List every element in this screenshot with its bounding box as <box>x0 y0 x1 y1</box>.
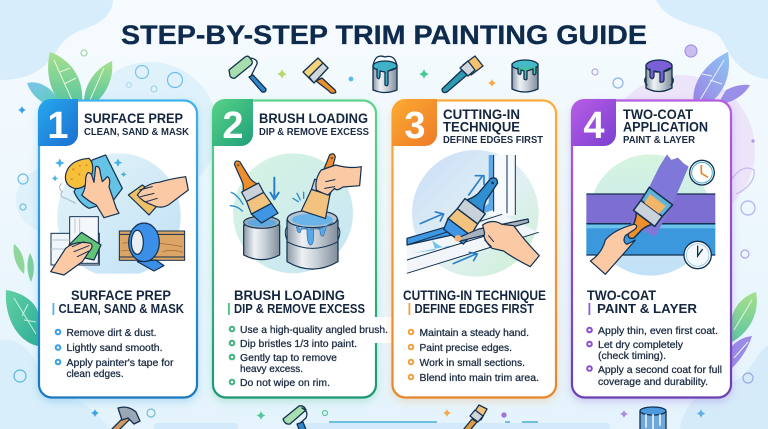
badge 2: 2 <box>222 105 244 147</box>
lower heading 1: SURFACE PREP <box>71 288 171 303</box>
heading 2 <box>259 111 369 138</box>
lower heading 4: PAINT & LAYER <box>597 302 697 316</box>
bullet list 2: Dip bristles 1/3 into paint. <box>240 338 357 350</box>
lower heading 2: DIP & REMOVE EXCESS <box>234 302 365 316</box>
icon: green-drip can, top <box>512 60 538 92</box>
leaves: right side <box>732 292 757 368</box>
bullet list 3: Paint precise edges. <box>420 342 512 354</box>
icon: roller, bottom <box>283 406 307 429</box>
bullet list 2: Gently tap to remove <box>240 352 337 364</box>
heading 1: SURFACE PREP <box>84 111 183 126</box>
card 2 frame <box>213 100 376 398</box>
bullet list 3 <box>409 327 539 384</box>
badge 3 <box>392 99 437 147</box>
icon: paint roller, top <box>229 56 266 92</box>
leaves: top left <box>27 52 112 102</box>
heading 3: DEFINE EDGES FIRST <box>443 134 544 146</box>
panel: step 3 cutting-in technique <box>392 99 556 398</box>
illustration: two coats on trim with clocks <box>586 154 715 276</box>
lower heading 3: DEFINE EDGES FIRST <box>414 302 534 316</box>
bullet list 3: Maintain a steady hand. <box>420 327 529 339</box>
badge 1 <box>38 99 78 147</box>
lower heading 1 <box>52 288 184 316</box>
bullet list 4: Apply a second coat for full <box>598 364 722 376</box>
bullet list 1: Apply painter's tape for <box>66 357 174 369</box>
card 3 frame <box>392 100 556 398</box>
bullet list 4: coverage and durability. <box>598 376 708 388</box>
white label overlapping card edge <box>370 317 392 343</box>
title: STEP-BY-STEP TRIM PAINTING GUIDE <box>121 20 647 50</box>
heading 4 <box>623 107 708 146</box>
icon: hammer, bottom <box>112 407 140 429</box>
bullet list 4: (check timing). <box>598 350 666 362</box>
panel: step 1 surface prep <box>38 99 197 398</box>
bullet list 4: Apply thin, even first coat. <box>598 325 718 337</box>
bullet list 2: heavy excess. <box>240 363 303 375</box>
heading 2: DIP & REMOVE EXCESS <box>259 126 369 138</box>
icon: blue paint can, bottom <box>640 407 666 429</box>
heading 3: CUTTING-IN <box>443 107 520 122</box>
bullet list 2: Use a high-quality angled brush. <box>240 324 388 336</box>
leaves: top right <box>693 52 754 194</box>
bullet list 2: Do not wipe on rim. <box>240 377 330 389</box>
lower heading 2: BRUSH LOADING <box>234 288 345 303</box>
badge 4: 4 <box>583 105 605 147</box>
lower heading 1: CLEAN, SAND & MASK <box>58 302 184 316</box>
panel: step 4 two-coat application <box>571 99 731 398</box>
badge 2 <box>212 99 253 147</box>
icon: brush, bottom <box>459 405 487 429</box>
bullet list 1: clean edges. <box>66 368 124 380</box>
heading 1: CLEAN, SAND & MASK <box>84 126 189 138</box>
icon: purple can, top <box>645 60 673 92</box>
heading 4: PAINT & LAYER <box>623 134 695 146</box>
illustration: cleaning, sanding and masking <box>51 153 188 275</box>
lower heading 4: TWO-COAT <box>587 288 657 303</box>
bullet list 4 <box>587 325 722 388</box>
bullet list 1 <box>56 327 174 380</box>
illustration: brushes dipped in paint cans <box>226 150 361 273</box>
badge 3: 3 <box>404 105 426 147</box>
heading 2: BRUSH LOADING <box>259 111 368 126</box>
icon: paint can, top <box>373 56 397 92</box>
badge 1: 1 <box>47 105 69 147</box>
bullet list 4: Let dry completely <box>598 339 684 351</box>
bullet list 3: Work in small sections. <box>420 357 525 369</box>
card 4 frame <box>572 100 731 398</box>
heading 3: TECHNIQUE <box>443 120 520 134</box>
lower heading 3: CUTTING-IN TECHNIQUE <box>403 288 546 303</box>
bullet list 3: Blend into main trim area. <box>420 372 539 384</box>
leaves: left side <box>6 244 38 346</box>
lower heading 2 <box>228 288 365 316</box>
bullet list 1: Lightly sand smooth. <box>66 342 162 354</box>
card 1 frame <box>39 100 197 398</box>
heading 4: APPLICATION <box>623 120 708 134</box>
badge 4 <box>571 99 616 147</box>
lower heading 3 <box>403 288 546 316</box>
bullet list 1: Remove dirt & dust. <box>66 327 156 339</box>
bullet list 2 <box>230 324 388 389</box>
icon: wide brush, top <box>303 58 336 93</box>
panel: step 2 brush loading <box>212 99 392 398</box>
lower heading 4 <box>587 288 697 316</box>
heading 4: TWO-COAT <box>623 107 694 122</box>
heading 3 <box>443 107 544 146</box>
icon: teal brush, top <box>442 56 483 93</box>
heading 1 <box>84 111 189 138</box>
illustration: cutting in along window trim <box>407 150 539 277</box>
